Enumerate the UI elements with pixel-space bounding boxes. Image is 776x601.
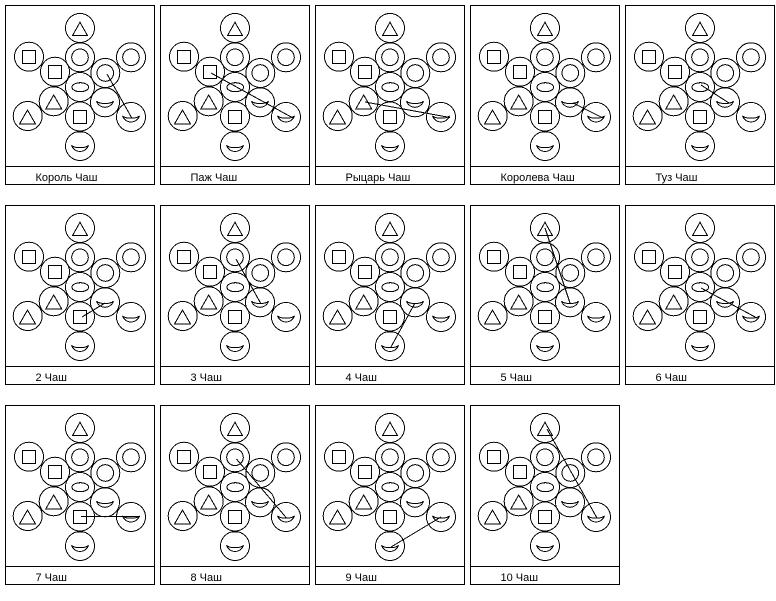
six-pointed star diagram xyxy=(478,214,610,360)
six-pointed star diagram xyxy=(168,14,300,160)
connector line xyxy=(391,303,415,347)
six-pointed star diagram xyxy=(633,14,766,160)
panel: 6 Чаш xyxy=(626,206,774,384)
connector line xyxy=(81,516,140,517)
six-pointed star diagram xyxy=(633,214,766,360)
label: 10 Чаш xyxy=(500,572,538,584)
label: 7 Чаш xyxy=(36,572,67,584)
label: 5 Чаш xyxy=(500,372,532,384)
six-pointed star diagram xyxy=(323,214,456,360)
panel: Туз Чаш xyxy=(626,6,774,184)
label: 9 Чаш xyxy=(346,572,377,584)
panel frame xyxy=(6,406,154,584)
connector line xyxy=(391,517,441,547)
six-pointed star diagram xyxy=(323,14,456,160)
six-pointed star diagram xyxy=(478,14,610,160)
panel frame xyxy=(316,6,464,184)
panel: 9 Чаш xyxy=(316,406,464,584)
panel frame xyxy=(316,206,464,384)
six-pointed star diagram xyxy=(323,414,456,560)
label: Королева Чаш xyxy=(500,172,575,184)
panel frame xyxy=(470,6,620,184)
panel frame xyxy=(626,6,774,184)
panel: 4 Чаш xyxy=(316,206,464,384)
connector line xyxy=(82,303,105,317)
panel: 10 Чаш xyxy=(470,406,620,584)
label: 6 Чаш xyxy=(656,372,687,384)
connector line xyxy=(701,85,729,103)
panel: Паж Чаш xyxy=(160,6,310,184)
label: 4 Чаш xyxy=(346,372,377,384)
label: Паж Чаш xyxy=(190,172,237,184)
panel: 2 Чаш xyxy=(6,206,154,384)
label: Рыцарь Чаш xyxy=(346,172,411,184)
connector line xyxy=(236,459,286,518)
connector line xyxy=(107,74,132,118)
panel frame xyxy=(470,406,620,584)
label: Король Чаш xyxy=(36,172,98,184)
six-pointed star diagram xyxy=(168,214,300,360)
six-pointed star diagram xyxy=(13,214,146,360)
label: 3 Чаш xyxy=(190,372,222,384)
panel frame xyxy=(6,206,154,384)
panel frame xyxy=(160,406,310,584)
panel: Королева Чаш xyxy=(470,6,620,184)
panel: 7 Чаш xyxy=(6,406,154,584)
panel frame xyxy=(470,206,620,384)
label: Туз Чаш xyxy=(656,172,698,184)
connector line xyxy=(573,103,603,118)
connector line xyxy=(701,288,757,318)
six-pointed star diagram xyxy=(168,414,300,560)
connector line xyxy=(547,429,597,518)
panel frame xyxy=(6,6,154,184)
panel frame xyxy=(160,6,310,184)
six-pointed star diagram xyxy=(13,414,146,560)
panel: 5 Чаш xyxy=(470,206,620,384)
connector line xyxy=(545,228,570,303)
panel frame xyxy=(626,206,774,384)
connector line xyxy=(365,102,450,118)
connector line xyxy=(211,73,293,118)
panel: Король Чаш xyxy=(6,6,154,184)
panel: 8 Чаш xyxy=(160,406,310,584)
label: 2 Чаш xyxy=(36,372,67,384)
connector line xyxy=(236,259,260,303)
panel frame xyxy=(316,406,464,584)
six-pointed star diagram xyxy=(478,414,610,560)
six-pointed star diagram xyxy=(13,14,146,160)
panel: 3 Чаш xyxy=(160,206,310,384)
label: 8 Чаш xyxy=(190,572,222,584)
panel: Рыцарь Чаш xyxy=(316,6,464,184)
panel frame xyxy=(160,206,310,384)
